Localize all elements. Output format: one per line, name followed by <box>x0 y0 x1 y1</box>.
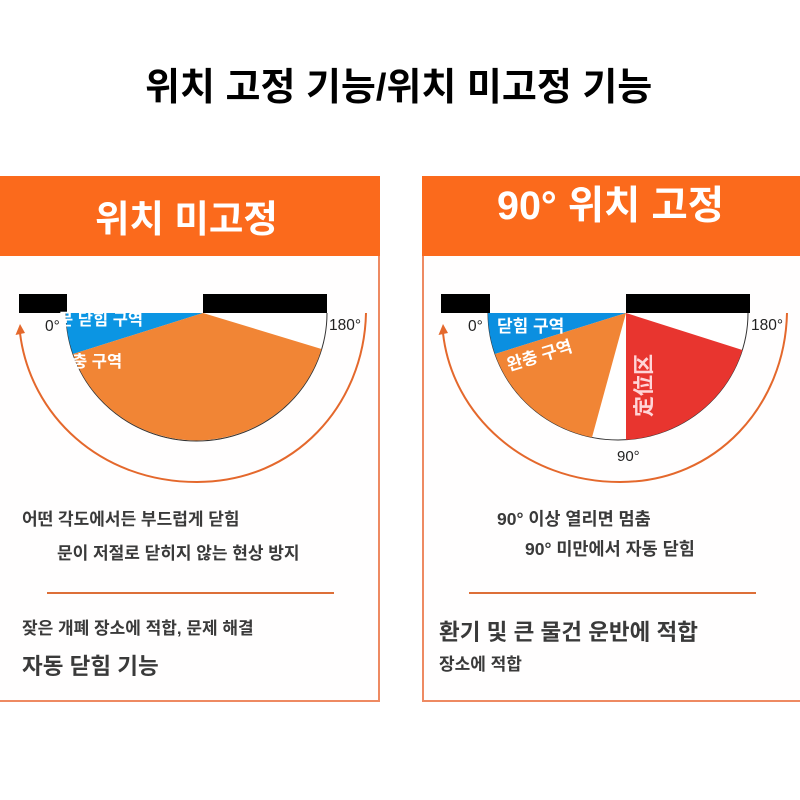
right text: hold line 1: 90° 이상 열리면 멈춤 <box>497 509 651 529</box>
right text: hold line 2: 90° 미만에서 자동 닫힘 <box>525 539 695 559</box>
right text: suitable places: 장소에 적합 <box>439 655 522 674</box>
left text: auto close: 자동 닫힘 기능 <box>22 654 159 679</box>
right door frame bars <box>441 294 750 313</box>
right text: ventilation: 환기 및 큰 물건 운반에 적합 <box>439 620 698 645</box>
right 180 label: 180° <box>751 317 783 334</box>
right 90 label: 90° <box>617 448 640 465</box>
left buffer zone wedge <box>73 313 322 440</box>
left text: closing behaviour line 2: 문이 저절로 닫히지 않는 현상 방지 <box>57 544 300 563</box>
left door frame bars <box>19 294 327 313</box>
right hold zone label: 定位区 <box>628 354 658 417</box>
right zero label: 0° <box>468 318 483 335</box>
left zero label: 0° <box>45 318 60 335</box>
title: 위치 고정 기능/위치 미고정 기능 <box>145 67 652 109</box>
right panel heading <box>422 176 800 256</box>
right sweep outline <box>488 313 748 440</box>
left text: usage: 잦은 개폐 장소에 적합, 문제 해결 <box>22 619 254 638</box>
left buffer zone label: 충 구역 <box>72 352 122 371</box>
right divider <box>469 592 756 594</box>
left panel heading <box>0 176 380 256</box>
left closing zone label: 문 닫힘 구역 <box>58 310 143 329</box>
right hold zone wedge <box>626 313 742 440</box>
right buffer zone label: 완충 구역 <box>505 337 575 375</box>
left 180 label: 180° <box>329 317 361 334</box>
right closing zone wedge <box>488 313 626 354</box>
right panel heading: 90° 위치 고정 <box>497 184 724 228</box>
left text: closing behaviour line 1: 어떤 각도에서든 부드럽게 닫힘 <box>22 510 240 529</box>
left sweep outline <box>66 313 327 441</box>
right closing zone label: 닫힘 구역 <box>497 317 564 336</box>
left divider <box>47 592 334 594</box>
right arrow <box>438 313 787 482</box>
left closing zone wedge <box>66 313 203 354</box>
left panel heading: 위치 미고정 <box>95 198 278 240</box>
right buffer zone wedge <box>495 313 626 437</box>
left arrow <box>16 313 366 482</box>
